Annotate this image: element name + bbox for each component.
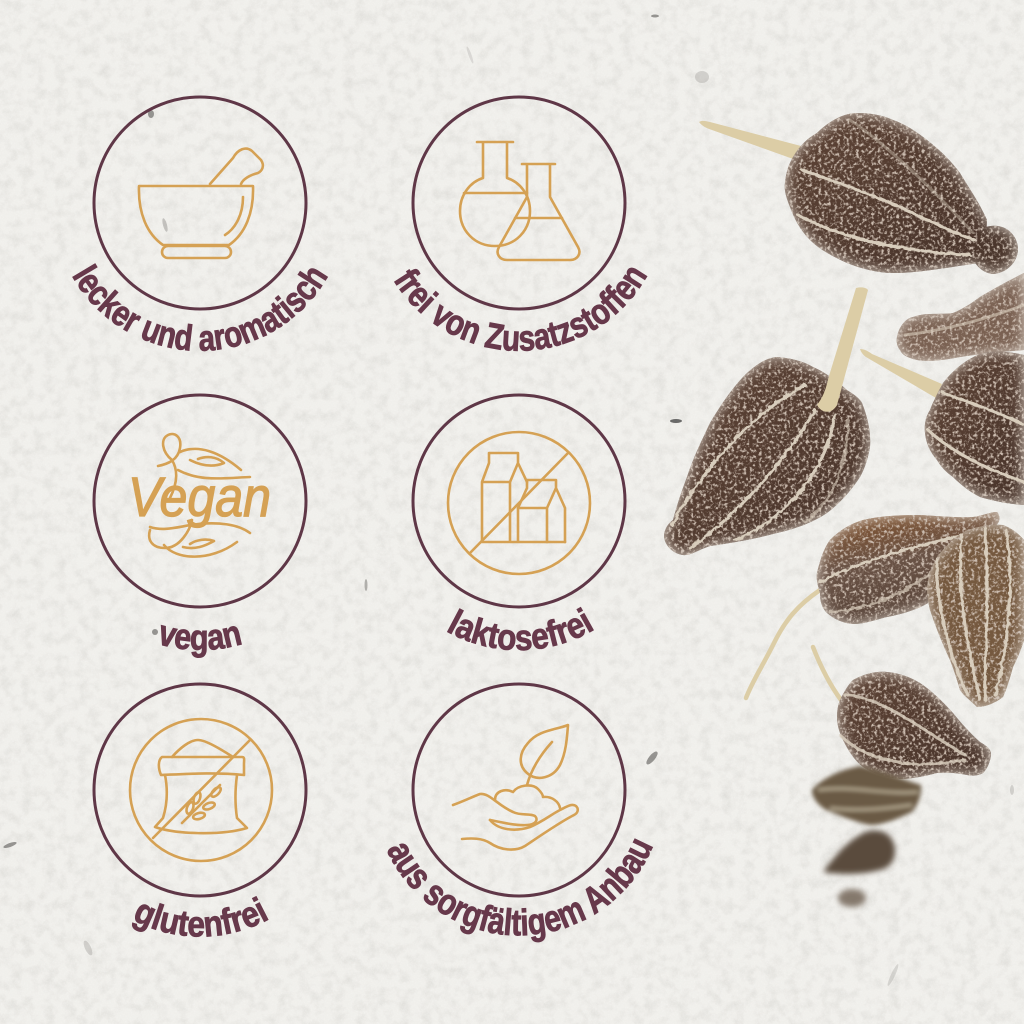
label: aus sorgfältigem Anbau: aus sorgfältigem Anbau xyxy=(388,838,654,942)
seed: lower xyxy=(813,647,991,779)
label: vegan: vegan xyxy=(160,624,242,658)
seed: far blurred xyxy=(838,889,866,907)
seed: more blurred xyxy=(823,831,895,874)
panel: vegan xyxy=(92,394,308,692)
icon: crossed-out milk cartons xyxy=(448,432,590,574)
seed: right upper xyxy=(897,273,1024,361)
icon: mortar and pestle xyxy=(139,149,263,258)
seed: striped front xyxy=(927,525,1024,707)
icon: hand holding seedling xyxy=(453,725,578,850)
seed: blurred xyxy=(812,766,921,825)
panel: aus sorgfältigem Anbau xyxy=(388,682,654,942)
label: lecker und aromatisch: lecker und aromatisch xyxy=(72,263,328,352)
icon: vegan lettering with leaves xyxy=(128,434,271,557)
panel: glutenfrei xyxy=(92,682,308,938)
panel: frei von Zusatzstoffen xyxy=(394,96,648,352)
seed: right middle xyxy=(860,349,1024,505)
illustration: falling anise seeds xyxy=(664,113,1024,907)
panel: lecker und aromatisch xyxy=(72,96,328,352)
seed: large left xyxy=(664,287,870,555)
icon: crossed-out flour sack with wheat xyxy=(130,719,272,861)
label: frei von Zusatzstoffen: frei von Zusatzstoffen xyxy=(394,268,648,352)
icon: vegan lettering with leaves: Vegan xyxy=(128,465,271,528)
panel: laktosefrei xyxy=(412,394,626,698)
label: glutenfrei: glutenfrei xyxy=(132,896,269,938)
seed: middle brown xyxy=(746,512,999,698)
seed: top xyxy=(699,113,1018,274)
label: laktosefrei: laktosefrei xyxy=(446,606,594,651)
icon: laboratory flasks xyxy=(460,142,579,260)
